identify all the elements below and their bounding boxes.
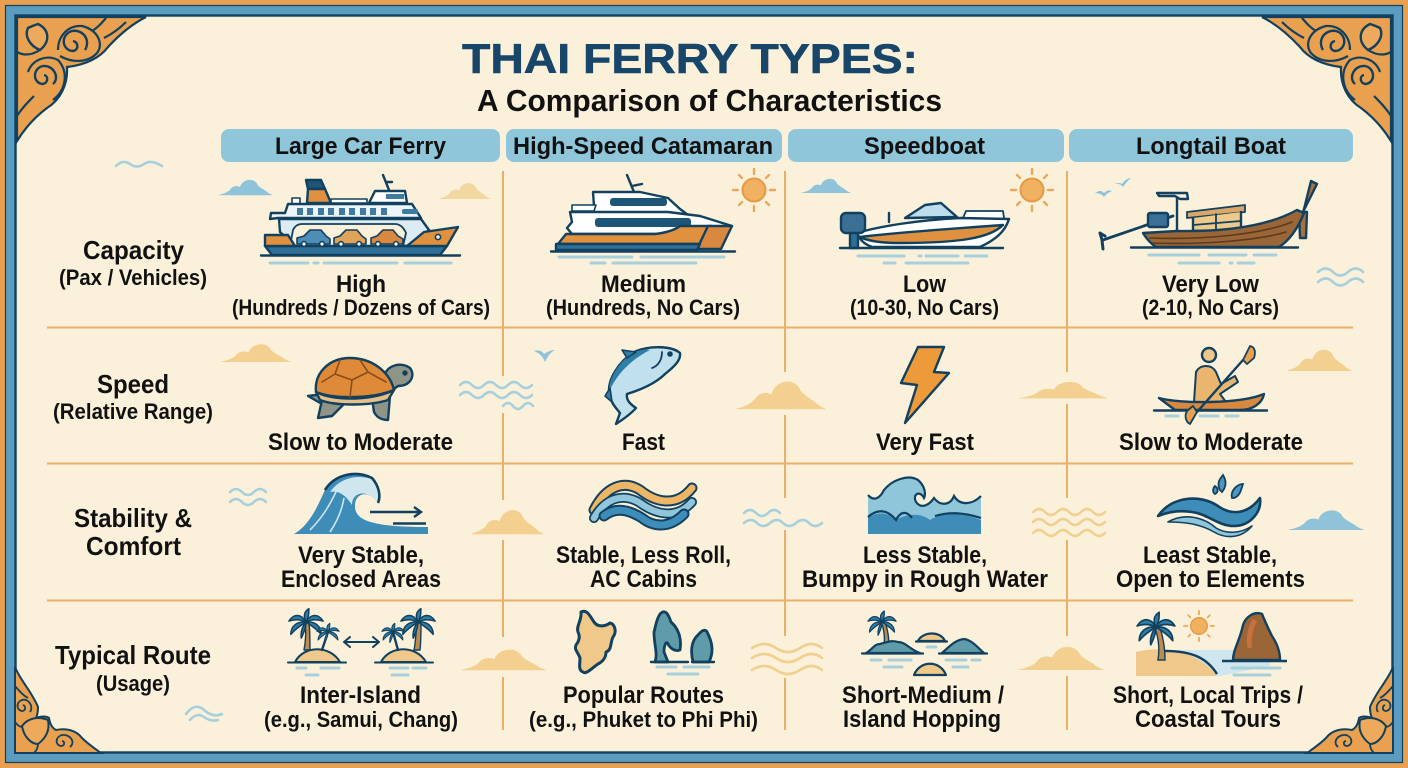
route values: Inter-Island: [300, 682, 421, 709]
icon: kayaker: [1154, 346, 1267, 424]
row labels: [53, 235, 213, 696]
stability values: Enclosed Areas: [281, 566, 441, 593]
capacity values: [232, 271, 1279, 320]
speed values: Slow to Moderate: [268, 429, 453, 456]
corner ornament: top left: [17, 17, 146, 141]
column headers: [221, 129, 1353, 162]
icon: rough water: [868, 478, 981, 534]
route values: Coastal Tours: [1135, 706, 1281, 733]
speed values: Slow to Moderate: [1119, 429, 1303, 456]
route values: [264, 682, 1303, 733]
corner ornament: bottom right: [1307, 667, 1393, 753]
icon: longtail boat: [1100, 181, 1317, 263]
icon: lightning bolt: [901, 347, 949, 423]
stability values: Very Stable,: [298, 542, 424, 569]
route values: Island Hopping: [843, 706, 1001, 733]
stability values: Open to Elements: [1116, 566, 1305, 593]
corner ornament: top right: [1262, 17, 1391, 141]
row labels: (Relative Range): [53, 399, 213, 424]
background decorations: clouds, waves, birds, suns: [116, 162, 1364, 721]
row labels: Comfort: [86, 531, 181, 561]
cars on the ferry deck: [297, 230, 403, 246]
capacity values: (Hundreds / Dozens of Cars): [232, 295, 490, 320]
icon: large wave with arrow: [294, 474, 428, 534]
capacity values: (10-30, No Cars): [850, 295, 999, 320]
capacity values: (2-10, No Cars): [1142, 295, 1279, 320]
route values: Short-Medium /: [842, 682, 1004, 709]
column headers: Large Car Ferry: [275, 133, 446, 160]
route values: Popular Routes: [563, 682, 724, 709]
icon: fish: [605, 347, 680, 424]
stability values: AC Cabins: [590, 566, 697, 593]
column headers: Longtail Boat: [1136, 133, 1286, 160]
column headers: High-Speed Catamaran: [513, 133, 773, 160]
speed values: Fast: [622, 429, 665, 456]
row labels: (Usage): [96, 671, 170, 696]
icon: high-speed catamaran: [551, 175, 735, 263]
route values: Short, Local Trips /: [1113, 682, 1303, 709]
icon: map and limestone rocks: [575, 611, 714, 674]
icon: turtle: [308, 358, 412, 420]
row labels: Typical Route: [55, 640, 211, 670]
title: [462, 35, 942, 118]
icon: island hopping: [862, 611, 987, 675]
row labels: (Pax / Vehicles): [59, 265, 207, 290]
capacity values: Low: [903, 271, 947, 298]
row labels: Stability &: [74, 503, 192, 533]
stability values: [281, 542, 1305, 593]
icon: splash wave: [1158, 475, 1260, 537]
speed values: Very Fast: [876, 429, 974, 456]
icon: speedboat: [840, 203, 1009, 263]
title: A Comparison of Characteristics: [477, 83, 942, 118]
corner ornament: bottom left: [15, 667, 101, 753]
icon: smooth waves: [594, 485, 692, 525]
stability values: Less Stable,: [863, 542, 987, 569]
capacity values: Medium: [601, 271, 686, 298]
icon: large car ferry: [261, 175, 460, 263]
speed values: [268, 429, 1303, 456]
route values: (e.g., Samui, Chang): [264, 707, 458, 732]
grid lines: [47, 171, 1353, 730]
capacity values: High: [336, 271, 386, 298]
capacity values: (Hundreds, No Cars): [546, 295, 740, 320]
stability values: Stable, Less Roll,: [556, 542, 731, 569]
route values: (e.g., Phuket to Phi Phi): [529, 707, 758, 732]
icon: two islands with arrow: [288, 609, 435, 675]
icon: beach with rock: [1136, 611, 1287, 676]
stability values: Least Stable,: [1143, 542, 1277, 569]
row labels: Capacity: [83, 235, 184, 265]
title: THAI FERRY TYPES:: [462, 35, 918, 82]
row labels: Speed: [97, 369, 169, 399]
stability values: Bumpy in Rough Water: [802, 566, 1048, 593]
capacity values: Very Low: [1162, 271, 1260, 298]
column headers: Speedboat: [864, 133, 985, 160]
